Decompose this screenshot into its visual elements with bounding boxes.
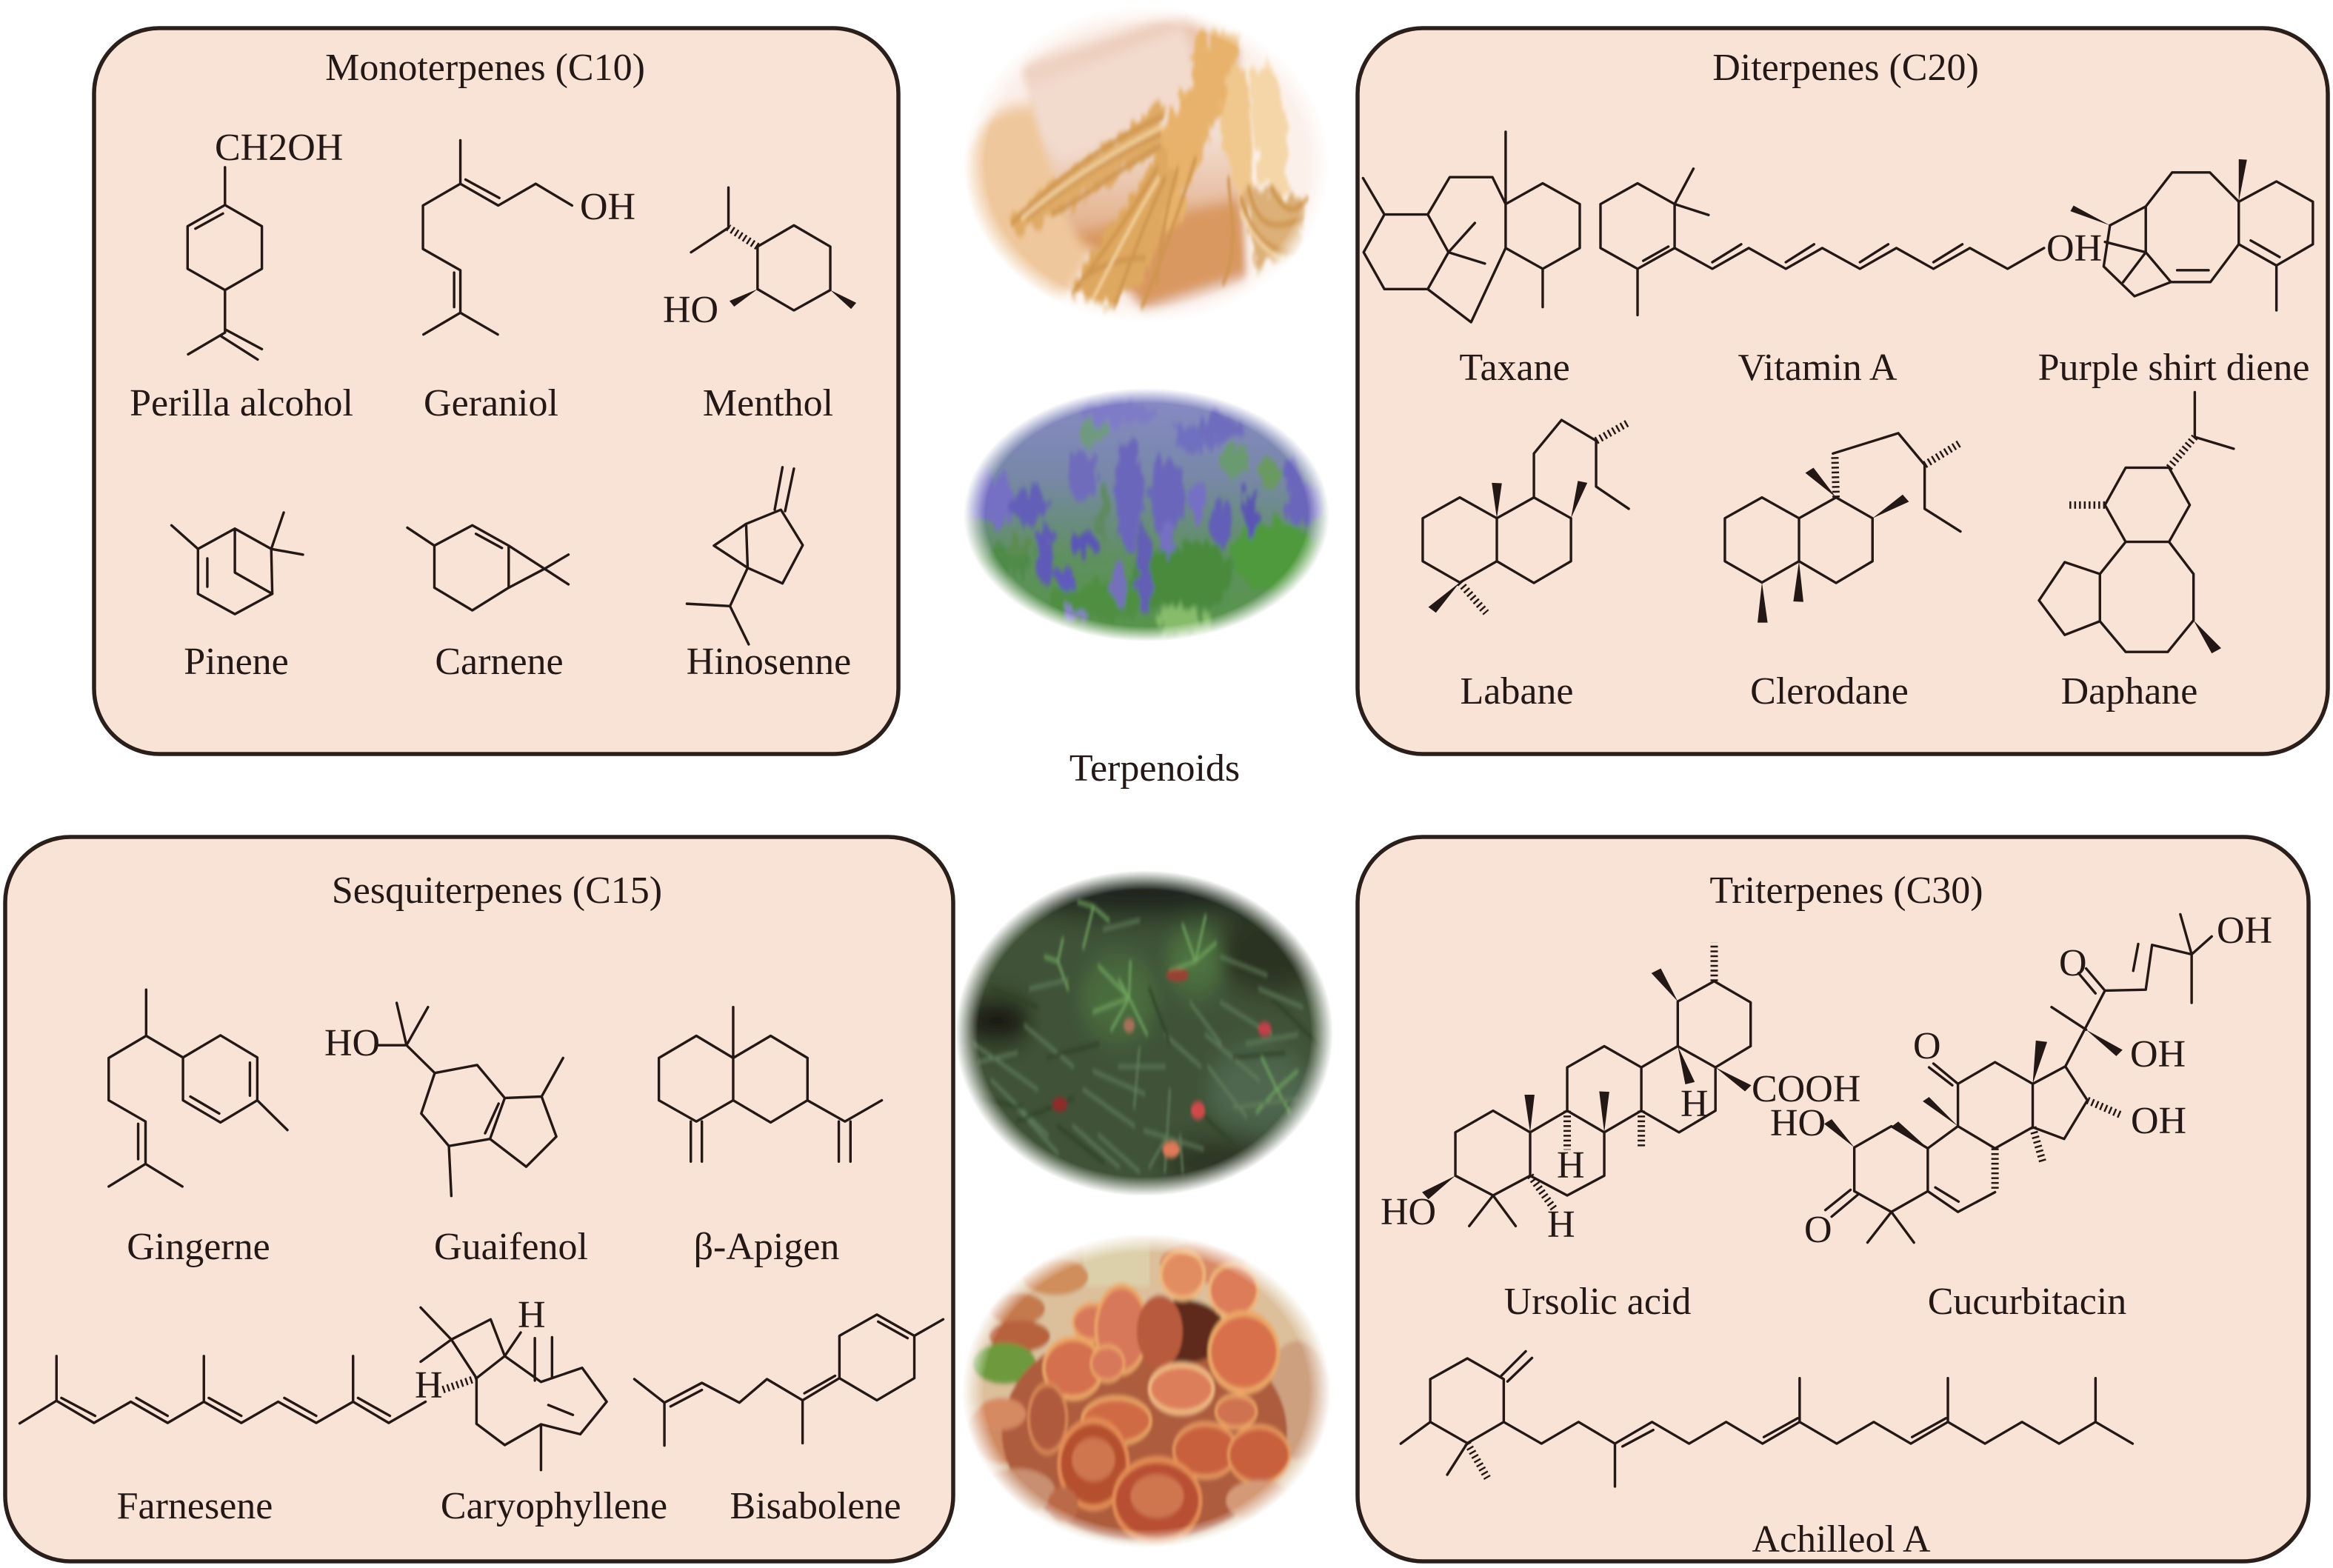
molecule: ursolic acid (1381, 943, 1860, 1323)
molecule: vitamin A: Vitamin A (1738, 347, 1898, 389)
molecule: ursolic acid: COOH (1752, 1068, 1860, 1110)
molecule: pinene: Pinene (184, 641, 289, 683)
photo: lavender field (964, 390, 1329, 641)
panel: triterpenes (1358, 837, 2309, 1561)
molecule: clerodane (1725, 433, 1960, 713)
molecule: labane (1423, 420, 1629, 713)
molecule: cucurbitacin: HO (1770, 1102, 1826, 1144)
photo: reishi mushrooms (956, 1231, 1338, 1555)
molecule: hinosenne (687, 467, 851, 683)
heading: diterpenes: Diterpenes (C20) (1712, 47, 1979, 89)
heading: monoterpenes: Monoterpenes (C10) (325, 47, 645, 89)
panel: sesquiterpenes (5, 837, 953, 1561)
molecule: caryophyllene: Caryophyllene (441, 1485, 667, 1527)
photo: yew branches with red berries (956, 871, 1332, 1195)
molecule: cucurbitacin: O (2059, 942, 2087, 984)
molecule: pinene (172, 513, 303, 683)
heading: sesquiterpenes: Sesquiterpenes (C15) (332, 870, 662, 912)
molecule: taxane (1363, 132, 1580, 389)
molecule: purple shirt diene: Purple shirt diene (2038, 347, 2309, 389)
molecule: clerodane: Clerodane (1750, 670, 1909, 713)
molecule: farnesene: Farnesene (117, 1485, 273, 1527)
molecule: menthol: HO (663, 289, 718, 331)
molecule: cucurbitacin: OH (2131, 1100, 2186, 1142)
molecule: geraniol: Geraniol (424, 382, 558, 424)
molecule: daphane: Daphane (2061, 670, 2197, 713)
molecule: beta-apigen (659, 1007, 882, 1268)
molecule: purple shirt diene (2038, 159, 2313, 389)
molecule: guaifenol: HO (324, 1022, 380, 1064)
panel: monoterpenes (94, 28, 898, 754)
heading: triterpenes: Triterpenes (C30) (1709, 870, 1983, 912)
molecule: daphane (2039, 392, 2234, 713)
molecule: caryophyllene: H (415, 1364, 443, 1407)
molecule: gingerne (109, 990, 287, 1268)
molecule: geraniol (423, 140, 635, 424)
molecule: hinosenne: Hinosenne (687, 641, 851, 683)
molecule: caryophyllene: H (518, 1294, 546, 1336)
molecule: bisabolene: Bisabolene (730, 1485, 901, 1527)
molecule: perilla alcohol: Perilla alcohol (130, 382, 353, 424)
molecule: vitamin A: OH (2046, 227, 2102, 270)
molecule: farnesene (20, 1356, 426, 1527)
molecule: achilleol A: Achilleol A (1752, 1518, 1931, 1561)
molecule: carnene: Carnene (435, 641, 564, 683)
molecule: beta-apigen: β-Apigen (694, 1226, 839, 1268)
molecule: cucurbitacin: Cucurbitacin (1928, 1281, 2126, 1323)
molecule: ursolic acid: H (1681, 1083, 1709, 1125)
molecule: menthol (663, 187, 856, 424)
central label: terpenoids: Terpenoids (1069, 747, 1240, 790)
molecule: cucurbitacin: OH (2217, 910, 2272, 952)
molecule: guaifenol (324, 1003, 588, 1268)
molecule: cucurbitacin: O (1804, 1209, 1832, 1251)
molecule: labane: Labane (1460, 670, 1574, 713)
molecule: cucurbitacin: O (1913, 1025, 1941, 1067)
molecule: achilleol A (1401, 1351, 2132, 1561)
molecule: carnene (407, 525, 568, 683)
molecule: gingerne: Gingerne (127, 1226, 270, 1268)
molecule: caryophyllene (415, 1294, 667, 1527)
molecule: ursolic acid: H (1557, 1144, 1585, 1187)
molecule: guaifenol: Guaifenol (434, 1226, 588, 1268)
molecule: perilla alcohol (130, 127, 353, 424)
molecule: cucurbitacin: OH (2130, 1033, 2186, 1075)
photo: ginseng roots (966, 12, 1321, 317)
molecule: taxane: Taxane (1459, 347, 1570, 389)
molecule: ursolic acid: H (1547, 1204, 1575, 1246)
molecule: cucurbitacin (1770, 910, 2272, 1323)
molecule: bisabolene (634, 1315, 943, 1527)
molecule: ursolic acid: Ursolic acid (1504, 1281, 1691, 1323)
molecule: geraniol: OH (580, 186, 635, 228)
molecule: perilla alcohol: CH2OH (215, 127, 343, 169)
panel: diterpenes (1358, 28, 2328, 754)
molecule: ursolic acid: HO (1381, 1191, 1436, 1233)
molecule: vitamin A (1601, 169, 2102, 389)
molecule: menthol: Menthol (703, 382, 833, 424)
